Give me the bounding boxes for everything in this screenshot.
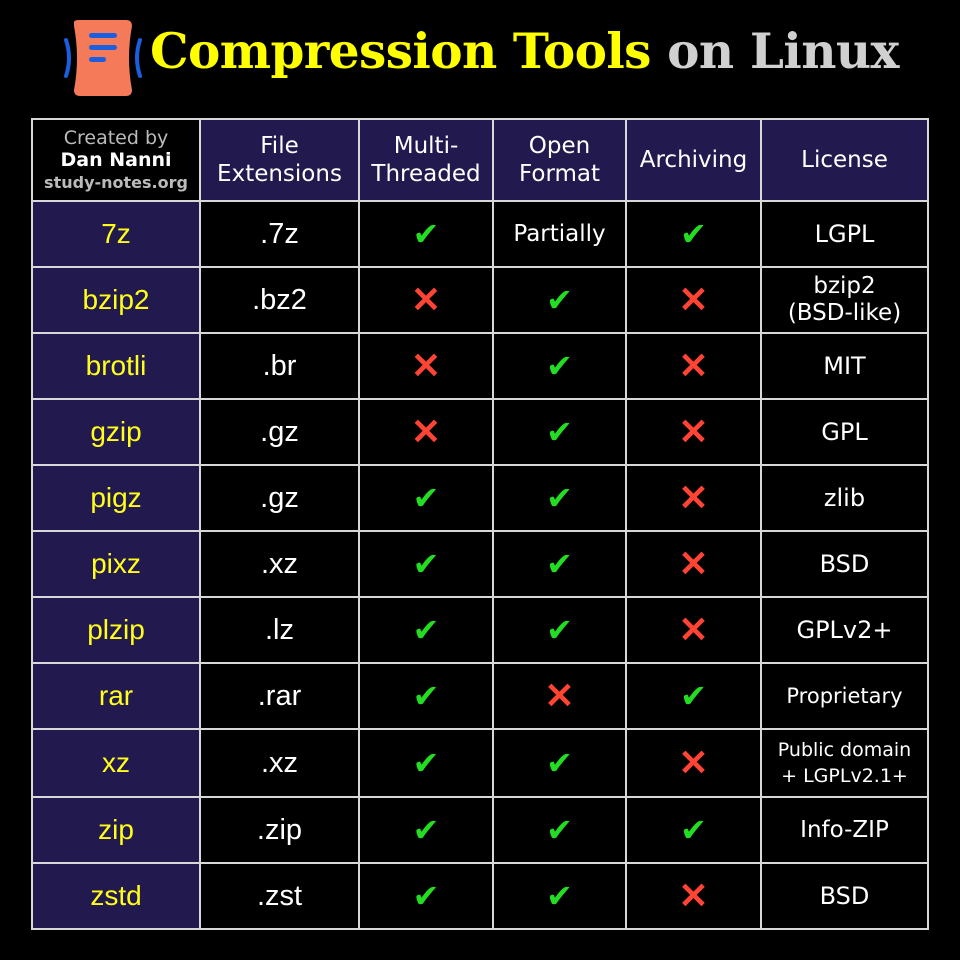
comparison table: .br [263,350,296,382]
comparison table: ✕ [678,411,709,452]
comparison table: ✔ [413,545,439,583]
comparison table: ✔ [413,811,439,849]
comparison table: License [801,147,888,173]
comparison table: Open [529,133,590,159]
comparison table: ✔ [413,215,439,253]
comparison table: + LGPLv2.1+ [781,765,908,787]
comparison table: ✕ [678,345,709,386]
comparison table: ✔ [546,611,573,649]
comparison table: BSD [820,550,869,578]
comparison table: gzip [90,416,142,447]
comparison table: ✕ [678,279,709,320]
comparison table: .gz [260,416,299,448]
comparison table: Partially [513,221,606,247]
comparison table: GPL [821,418,868,446]
comparison table: ✔ [413,479,439,517]
comparison table: .xz [261,548,298,580]
comparison table: GPLv2+ [796,616,893,644]
comparison table: ✔ [413,877,439,915]
comparison table: zlib [824,484,865,512]
comparison table: File [260,133,299,159]
comparison table: .rar [258,680,301,712]
comparison table: zstd [90,880,142,911]
comparison table: plzip [87,614,145,645]
comparison table: xz [102,747,130,778]
comparison table: bzip2 [813,273,876,299]
comparison table: ✔ [546,811,573,849]
comparison table: .lz [265,614,294,646]
comparison table: ✔ [546,545,573,583]
comparison table: ✔ [413,744,439,782]
comparison table: Extensions [217,161,342,187]
comparison table: 7z [101,218,131,249]
comparison table: Public domain [778,739,911,761]
comparison table: BSD [820,882,869,910]
comparison table: ✔ [546,413,573,451]
comparison table: (BSD-like) [788,300,901,326]
comparison table: ✕ [678,609,709,650]
comparison table: ✕ [544,675,575,716]
comparison table: ✔ [680,811,707,849]
comparison table: ✔ [546,877,573,915]
comparison table: ✕ [678,742,709,783]
comparison table: ✔ [680,677,707,715]
comparison table: ✔ [413,677,439,715]
comparison table: .xz [261,746,298,778]
comparison table: pixz [91,548,141,579]
comparison table: .zip [257,814,302,846]
comparison table: ✔ [413,611,439,649]
comparison table: ✔ [546,281,573,319]
icon: compressed file [64,20,142,96]
comparison table: Format [519,161,600,187]
comparison table: Info-ZIP [800,817,889,843]
comparison table [31,118,929,930]
comparison table: ✕ [411,345,441,386]
comparison table: Dan Nanni [60,148,172,170]
comparison table: MIT [823,352,866,380]
comparison table: rar [99,680,133,711]
comparison table: zip [98,814,134,845]
comparison table: ✕ [678,875,709,916]
comparison table: ✔ [680,215,707,253]
comparison table: ✕ [411,411,441,452]
comparison table: Archiving [640,147,747,173]
comparison table: LGPL [815,220,874,248]
comparison table: bzip2 [83,284,149,315]
comparison table: ✔ [546,479,573,517]
comparison table: ✔ [546,347,573,385]
comparison table: Created by [64,126,168,148]
comparison table: Multi- [394,133,458,159]
comparison table: .7z [260,218,299,250]
comparison table: ✕ [678,543,709,584]
comparison table: study-notes.org [44,172,188,192]
comparison table: ✔ [546,744,573,782]
comparison table: .bz2 [252,284,307,316]
comparison table: .zst [257,880,302,912]
comparison table: ✕ [411,279,441,320]
title: Compression Tools on Linux [150,23,899,80]
comparison table: .gz [260,482,299,514]
comparison table: brotli [86,350,146,381]
comparison table: ✕ [678,477,709,518]
comparison table: Proprietary [786,684,903,708]
comparison table: pigz [90,482,142,513]
comparison table: Threaded [371,161,481,187]
